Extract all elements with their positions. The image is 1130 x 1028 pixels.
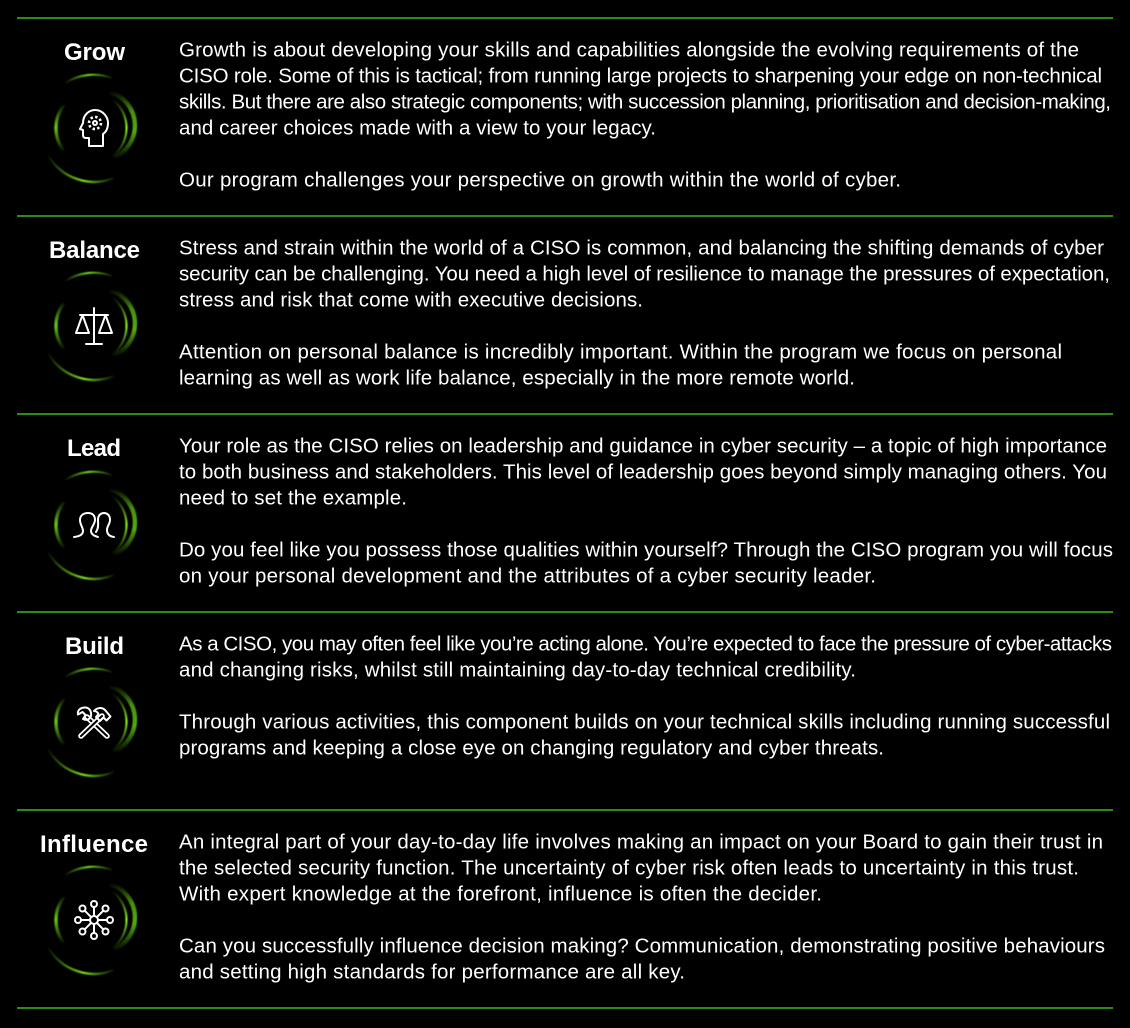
heading: Influence: Influence: [40, 831, 148, 858]
heading: Build: Build: [65, 633, 124, 660]
text block: Balance description: Attention on personal balance is incredibly important. Within the program we focus on personal: [179, 340, 1062, 364]
text block: Lead description: on your personal development and the attributes of a cyber security leader.: [179, 564, 876, 588]
text block: Balance description: stress and risk that come with executive decisions.: [179, 288, 643, 312]
text block: Influence description: the selected security function. The uncertainty of cyber risk often leads to uncertainty in this trust.: [179, 856, 1079, 880]
text block: Build description: Through various activities, this component builds on your technical skills including running successful: [179, 710, 1110, 734]
heading: Lead: Lead: [67, 435, 121, 462]
text block: Lead description: Your role as the CISO relies on leadership and guidance in cyber security – a topic of high importance: [179, 434, 1107, 458]
text block: Lead description: need to set the example.: [179, 486, 407, 510]
text block: Balance description: [179, 236, 1110, 390]
text block: Grow description: Growth is about developing your skills and capabilities alongside the evolving requirements of the: [179, 38, 1079, 62]
text block: Influence description: With expert knowledge at the forefront, influence is often the decider.: [179, 882, 822, 906]
heading: Grow: Grow: [64, 39, 125, 66]
text block: Build description: As a CISO, you may often feel like you’re acting alone. You’re expected to face the pressure of cyber-attacks: [179, 632, 1112, 656]
text block: Grow description: and career choices made with a view to your legacy.: [179, 116, 656, 140]
text block: Grow description: [179, 38, 1111, 192]
text block: Lead description: to both business and stakeholders. This level of leadership goes beyond simply managing others. You: [179, 460, 1107, 484]
icon: two people outline in glowing ring: [48, 472, 135, 579]
icon: head with gear in glowing ring: [48, 75, 135, 182]
heading: Balance: Balance: [49, 237, 140, 264]
text block: Influence description: [179, 830, 1105, 984]
text block: Build description: and changing risks, whilst still maintaining day-to-day technical credibility.: [179, 658, 856, 682]
icon: crossed hammer and wrench in glowing ring: [48, 669, 135, 776]
panel: Lead: [48, 434, 1113, 588]
text block: Balance description: learning as well as work life balance, especially in the more remote world.: [179, 366, 855, 390]
text block: Influence description: An integral part of your day-to-day life involves making an impact on your Board to gain their trust in: [179, 830, 1103, 854]
text block: Build description: [179, 632, 1112, 760]
panel: Build: [48, 632, 1112, 776]
panel: Grow: [48, 38, 1111, 192]
text block: Grow description: skills. But there are also strategic components; with succession planning, prioritisation and decision-making,: [179, 90, 1111, 114]
text block: Grow description: CISO role. Some of this is tactical; from running large projects to sharpening your edge on non-technical: [179, 64, 1102, 88]
text block: Balance description: Stress and strain within the world of a CISO is common, and balancing the shifting demands of cyber: [179, 236, 1104, 260]
text block: Build description: programs and keeping a close eye on changing regulatory and cyber threats.: [179, 736, 884, 760]
text block: Influence description: Can you successfully influence decision making? Communication, demonstrating positive behaviours: [179, 934, 1105, 958]
icon: scales in glowing ring: [48, 273, 135, 380]
panel: Balance: [48, 236, 1110, 390]
text block: Lead description: Do you feel like you possess those qualities within yourself? Through the CISO program you will focus: [179, 538, 1113, 562]
icon: connected hub network in glowing ring: [48, 867, 135, 974]
panel: Influence: [40, 830, 1105, 984]
text block: Balance description: security can be challenging. You need a high level of resilience to manage the pressures of expectation,: [179, 262, 1110, 286]
text block: Influence description: and setting high standards for performance are all key.: [179, 960, 685, 984]
text block: Grow description: Our program challenges your perspective on growth within the world of cyber.: [179, 168, 901, 192]
text block: Lead description: [179, 434, 1113, 588]
